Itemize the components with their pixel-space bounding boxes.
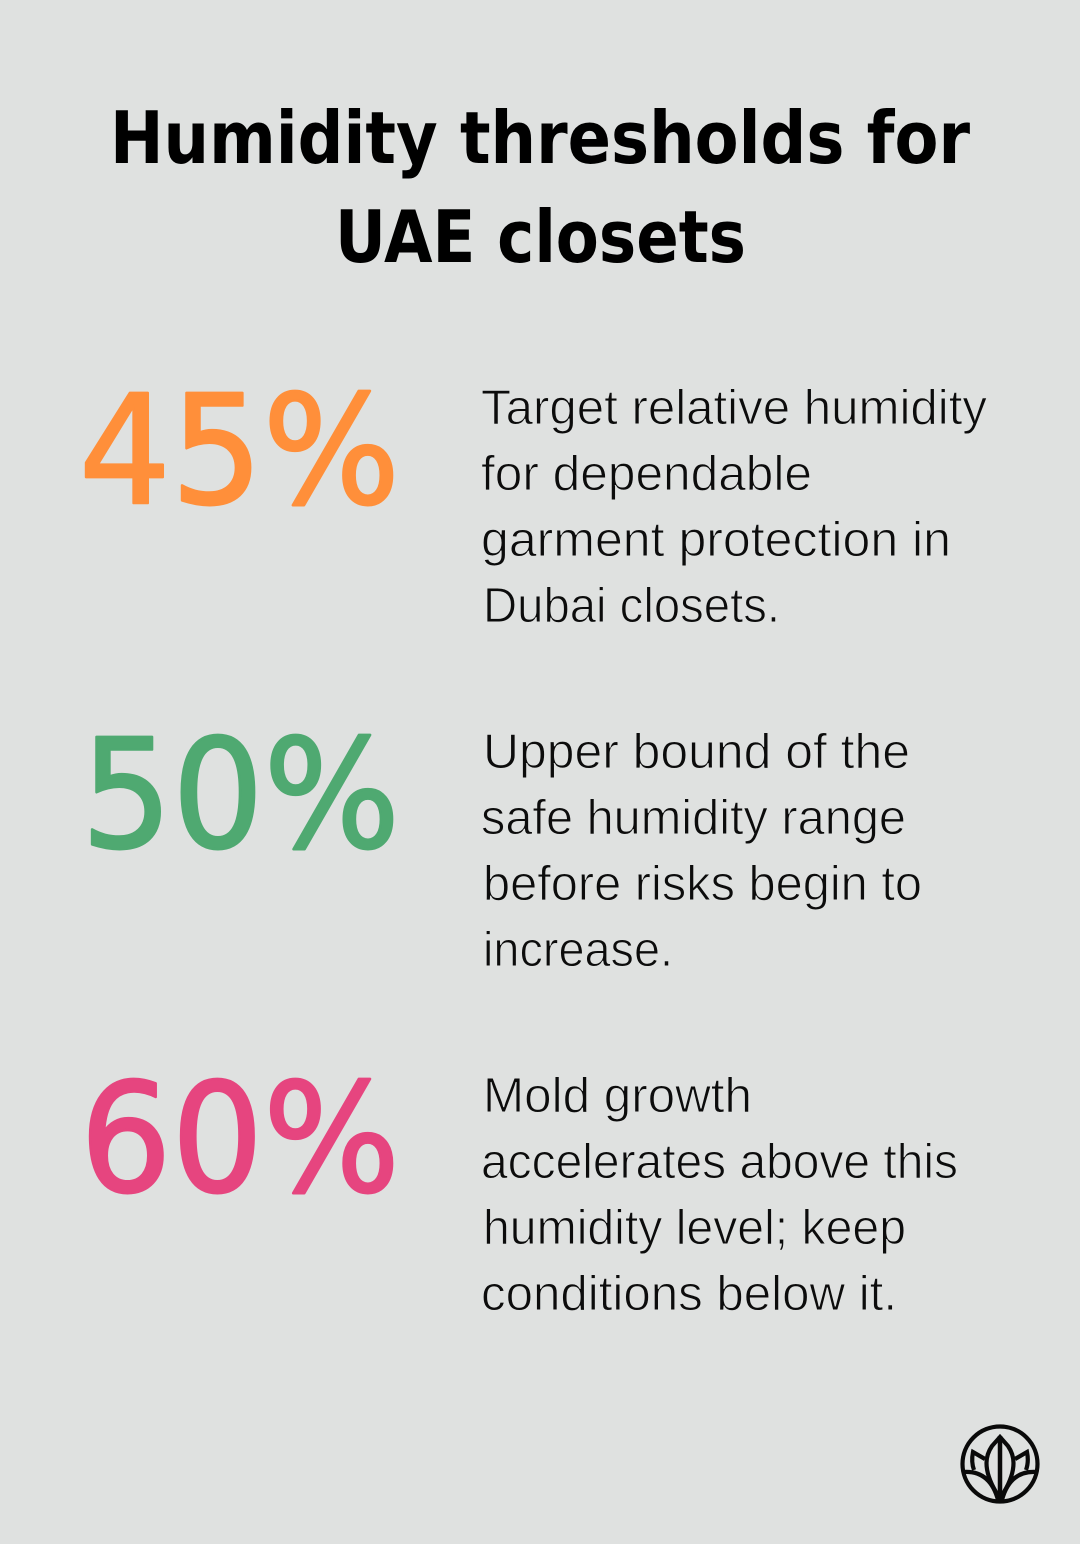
stat 2: 50% (81, 707, 922, 977)
description: mold growth: accelerates above this (481, 1135, 958, 1189)
title: UAE closets (335, 195, 746, 279)
description: target humidity: Target relative humidity (481, 381, 987, 435)
description: mold growth: humidity level; keep (483, 1201, 906, 1255)
icon: lotus logo (962, 1426, 1038, 1502)
description: target humidity: Dubai closets. (483, 579, 780, 633)
description: upper bound: increase. (483, 923, 673, 977)
description: upper bound: Upper bound of the (483, 725, 910, 779)
description: upper bound: before risks begin to (483, 857, 922, 911)
number: 50%: 50% (81, 707, 400, 883)
description: mold growth: conditions below it. (481, 1267, 897, 1321)
description: upper bound: safe humidity range (481, 791, 906, 845)
title (110, 96, 970, 279)
number: 45%: 45% (79, 363, 400, 539)
description: target humidity: for dependable (481, 447, 812, 501)
description: mold growth (481, 1069, 958, 1321)
number: 60%: 60% (80, 1051, 400, 1227)
title: Humidity thresholds for (110, 96, 970, 180)
description: mold growth: Mold growth (483, 1069, 752, 1123)
stat 3: 60% (80, 1051, 958, 1321)
description: upper bound (481, 725, 922, 977)
description: target humidity (481, 381, 987, 633)
description: target humidity: garment protection in (481, 513, 951, 567)
stat 1: 45% (79, 363, 987, 633)
